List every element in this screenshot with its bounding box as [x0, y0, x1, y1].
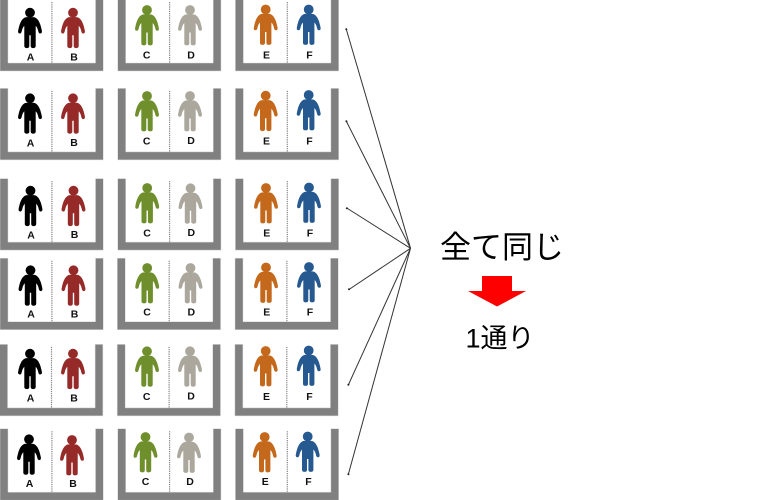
person D: D: [187, 391, 195, 403]
person F: F: [306, 50, 313, 62]
person B: B: [69, 478, 77, 490]
text: one way: 1通り: [466, 324, 535, 354]
tray A-B: [0, 0, 103, 71]
person C: C: [143, 50, 151, 62]
panel: row 1 trays: [0, 0, 339, 71]
tray E-F: [235, 344, 338, 416]
heading: all the same: 全て同じ: [440, 230, 564, 265]
panel: row 3 trays: [0, 179, 339, 250]
person E: E: [263, 50, 270, 62]
person D: D: [187, 50, 195, 62]
tray E-F: [235, 179, 339, 250]
person E: E: [263, 391, 270, 403]
person C: C: [142, 476, 150, 488]
person E: E: [263, 228, 270, 240]
person E: E: [262, 476, 269, 488]
person F: F: [306, 391, 313, 403]
person D: D: [187, 135, 195, 147]
person B: B: [70, 392, 78, 404]
person A: A: [27, 309, 35, 321]
tray C-D: [117, 344, 220, 416]
person A: A: [27, 393, 35, 405]
tray C-D: [117, 258, 221, 330]
person A: A: [27, 138, 35, 150]
person D: D: [188, 227, 196, 239]
tray A-B: [0, 179, 103, 250]
panel: row 2 trays: [0, 88, 339, 160]
person F: F: [306, 136, 313, 148]
person C: C: [143, 391, 151, 403]
tray C-D: [118, 429, 221, 500]
tray E-F: [235, 0, 339, 71]
person A: A: [26, 478, 34, 490]
tray E-F: [235, 429, 339, 500]
person D: D: [186, 476, 194, 488]
person A: A: [27, 52, 35, 64]
person B: B: [71, 308, 79, 320]
person C: C: [143, 307, 151, 319]
person F: F: [307, 307, 314, 319]
tray E-F: [235, 88, 339, 160]
tray A-B: [0, 344, 103, 416]
icon: red down arrow: [468, 276, 526, 306]
panel: row 6 trays: [0, 429, 339, 500]
tray C-D: [118, 179, 221, 250]
person D: D: [188, 306, 196, 318]
person E: E: [263, 136, 270, 148]
tray A-B: [0, 88, 103, 160]
person C: C: [143, 228, 151, 240]
person B: B: [70, 52, 78, 64]
person C: C: [143, 136, 151, 148]
tray C-D: [118, 0, 221, 71]
person F: F: [307, 228, 314, 240]
tray A-B: [0, 429, 103, 500]
tray E-F: [235, 258, 338, 330]
panel: row 5 trays: [0, 344, 338, 416]
person E: E: [263, 307, 270, 319]
person F: F: [305, 476, 312, 488]
person B: B: [70, 137, 78, 149]
person A: A: [27, 230, 35, 242]
panel: row 4 trays: [0, 258, 338, 330]
tray A-B: [0, 258, 103, 330]
person B: B: [71, 229, 79, 241]
arrows: lines fanning out to each row: [345, 28, 410, 475]
tray C-D: [118, 88, 221, 160]
